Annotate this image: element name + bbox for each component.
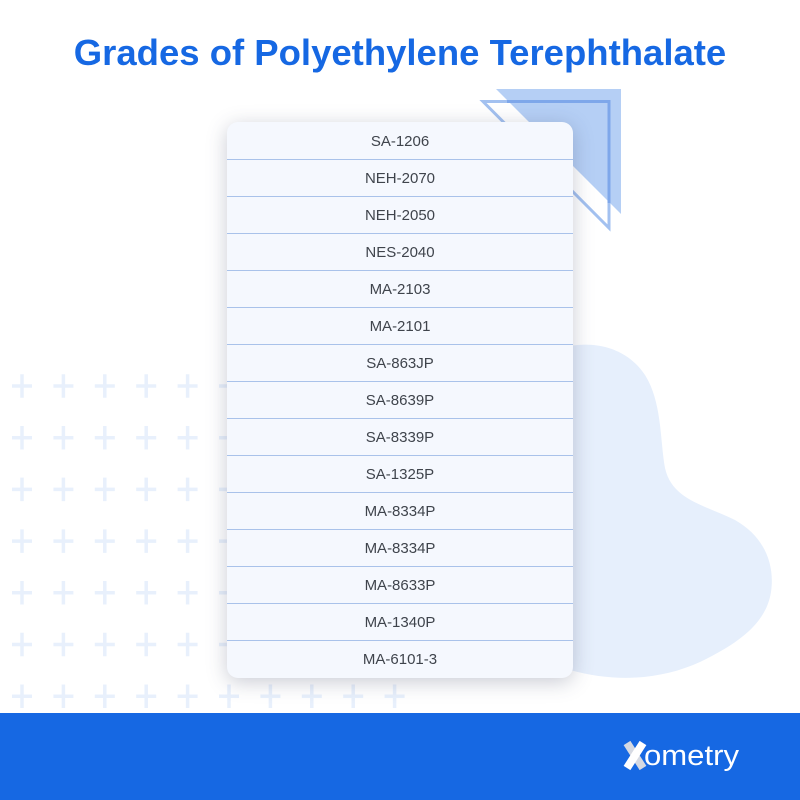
- title: Grades of Polyethylene Terephthalate: [74, 32, 726, 73]
- triangle overlap edge: [507, 102, 609, 203]
- row: NEH-2050: NEH-2050: [365, 207, 435, 224]
- row: MA-2103: MA-2103: [370, 281, 430, 298]
- row: SA-1206: [227, 123, 573, 160]
- row: NES-2040: [227, 234, 573, 271]
- row: MA-1340P: MA-1340P: [365, 614, 435, 631]
- row: MA-8334P: [227, 493, 573, 530]
- plus sign grid: [12, 374, 405, 708]
- row: MA-8334P second: [227, 530, 573, 567]
- row: SA-8339P: SA-8339P: [366, 429, 434, 446]
- panel: grades table: [227, 122, 573, 678]
- footer band: [0, 713, 800, 800]
- row: NEH-2050: [227, 197, 573, 234]
- row: MA-2101: [227, 308, 573, 345]
- row: NES-2040: NES-2040: [365, 244, 435, 261]
- row: MA-2101: MA-2101: [370, 318, 430, 335]
- row: NEH-2070: NEH-2070: [365, 170, 435, 187]
- row: MA-6101-3: MA-6101-3: [363, 651, 437, 668]
- row: SA-1325P: SA-1325P: [366, 466, 434, 483]
- blob shape: [560, 345, 772, 678]
- wordmark: ometry: [644, 740, 740, 772]
- row: SA-8639P: SA-8639P: [366, 392, 434, 409]
- outlined triangle: [483, 102, 609, 228]
- row: MA-8633P: MA-8633P: [365, 577, 435, 594]
- row: MA-8633P: [227, 567, 573, 604]
- row: SA-8339P: [227, 419, 573, 456]
- row: SA-8639P: [227, 382, 573, 419]
- row: SA-1325P: [227, 456, 573, 493]
- row: MA-8334P: MA-8334P: [365, 503, 435, 520]
- row: MA-1340P: [227, 604, 573, 641]
- logo: Xometry: [624, 740, 740, 772]
- row: SA-1206: SA-1206: [371, 133, 429, 150]
- icon: X mark: [627, 743, 643, 768]
- row: SA-863JP: SA-863JP: [366, 355, 434, 372]
- row: SA-863JP: [227, 345, 573, 382]
- filled triangle: [496, 89, 621, 214]
- row: MA-2103: [227, 271, 573, 308]
- row: NEH-2070: [227, 160, 573, 197]
- row: MA-8334P second: MA-8334P: [365, 540, 435, 557]
